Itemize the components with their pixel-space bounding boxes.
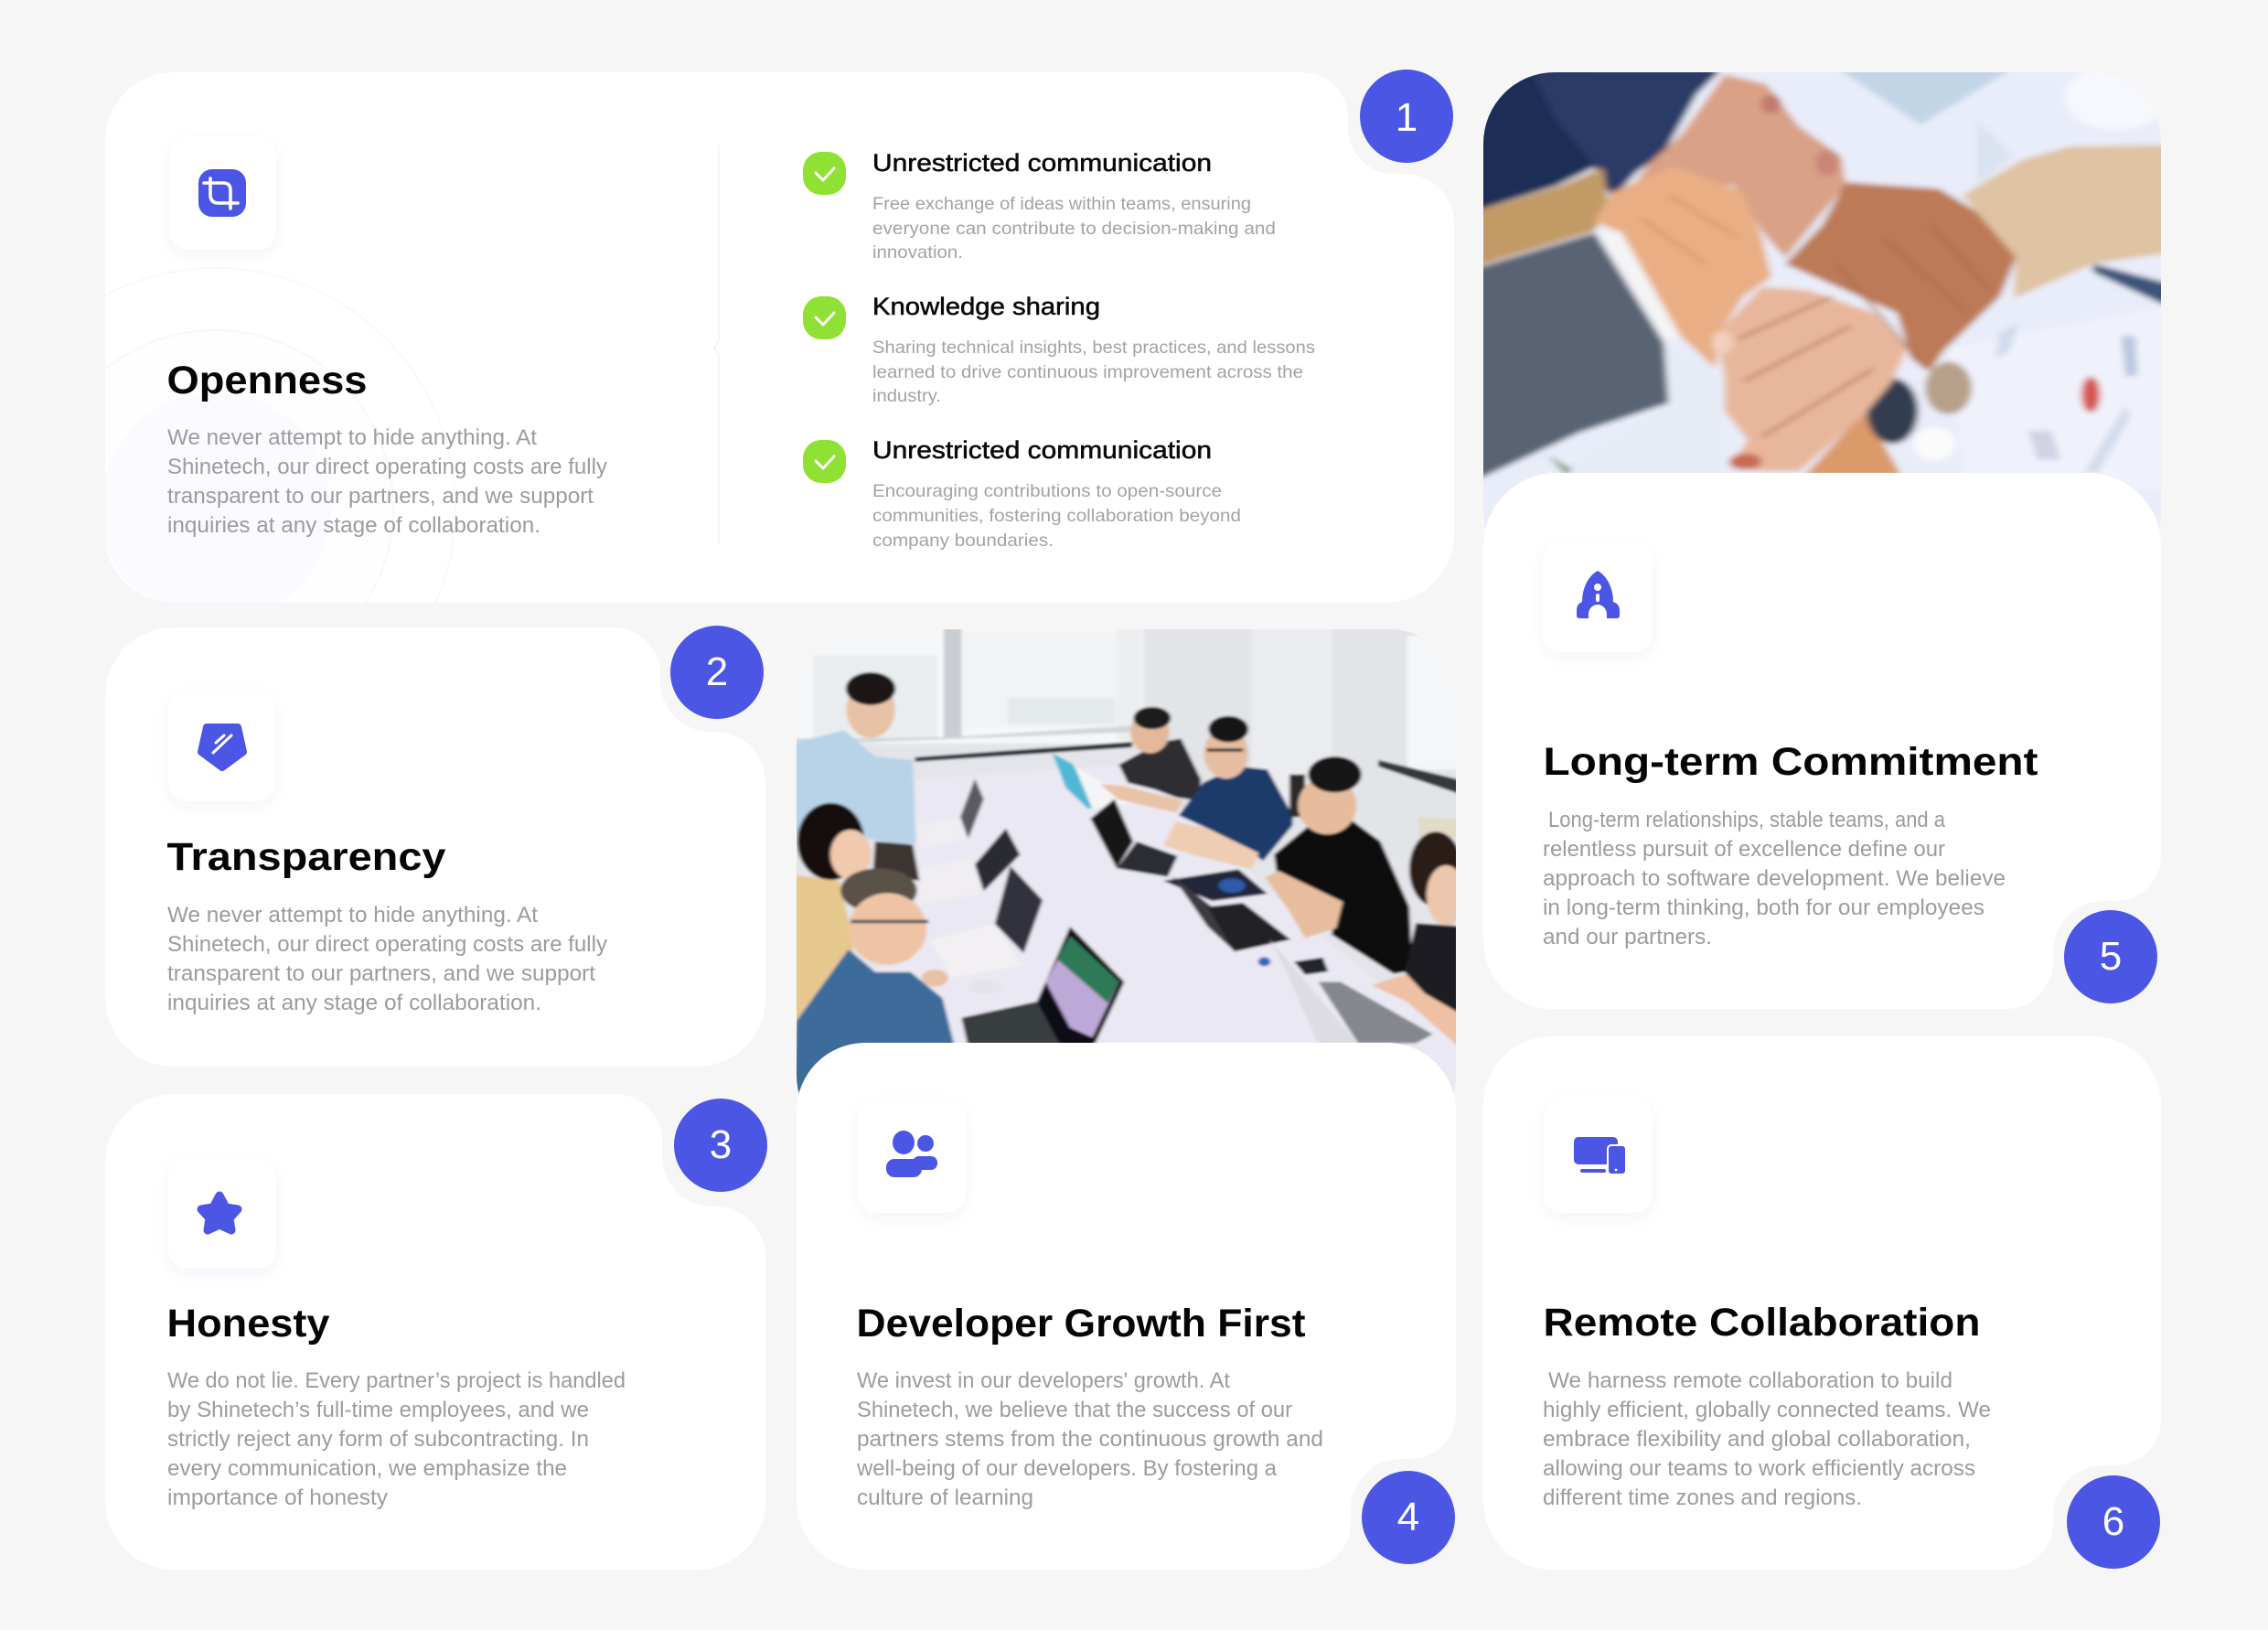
checklist item 3: communities, fostering collaboration beyond	[872, 506, 1241, 526]
card shape: developer growth first	[797, 1043, 1456, 1570]
text block: honesty body: by Shinetech’s full-time employees, and we	[167, 1398, 589, 1422]
badge 2	[670, 626, 764, 719]
text block: honesty body: importance of honesty	[167, 1485, 388, 1510]
checklist item 2: Knowledge sharing	[872, 293, 1100, 320]
icon: crop	[169, 136, 276, 250]
badge 4	[1362, 1471, 1455, 1564]
photo: stacked hands	[1483, 72, 2161, 529]
heading: Developer Growth First: Developer Growth First	[856, 1302, 1306, 1346]
card shape: openness	[105, 72, 1454, 603]
text block: developer growth body: partners stems from the continuous growth and	[857, 1427, 1323, 1452]
checklist item 1: innovation.	[872, 242, 963, 263]
checklist item 1: Unrestricted communication	[872, 149, 1212, 177]
text block: developer growth body: culture of learning	[857, 1485, 1033, 1510]
text block: long-term body: relentless pursuit of excellence define our	[1543, 837, 1945, 862]
text block: remote body	[1543, 1368, 1991, 1510]
heading: Transparency: Transparency	[166, 835, 446, 879]
text block: honesty body	[167, 1368, 626, 1510]
checklist item 3: company boundaries.	[872, 531, 1054, 551]
badge 6	[2067, 1475, 2160, 1569]
checklist item 2: learned to drive continuous improvement across the	[872, 362, 1303, 382]
badge 6: 6	[2102, 1499, 2124, 1544]
text block: transparency body	[167, 903, 607, 1015]
icon: rocket	[1543, 540, 1653, 652]
checklist item 3: Encouraging contributions to open-source	[872, 481, 1222, 501]
photo: team around a meeting table	[797, 629, 1456, 1094]
badge 3	[674, 1099, 767, 1192]
text block: long-term body: approach to software development. We believe	[1543, 866, 2006, 891]
text block: transparency body: inquiries at any stage of collaboration.	[167, 991, 541, 1015]
text block: transparency body: Shinetech, our direct operating costs are fully	[167, 932, 607, 957]
checklist item 1: everyone can contribute to decision-making and	[872, 219, 1276, 239]
heading: Long-term Commitment: Long-term Commitment	[1544, 740, 2038, 784]
text block: long-term body: Long-term relationships, stable teams, and a	[1548, 808, 1946, 832]
text block: openness body: transparent to our partners, and we support	[167, 484, 594, 509]
checklist item 2	[803, 293, 1315, 406]
panel: openness	[105, 72, 1454, 603]
text block: remote body: embrace flexibility and global collaboration,	[1543, 1427, 1971, 1452]
card shape: honesty	[105, 1094, 765, 1570]
text block: developer growth body: Shinetech, we believe that the success of our	[857, 1398, 1292, 1422]
icon: check	[803, 296, 846, 339]
text block: honesty body: every communication, we emphasize the	[167, 1456, 567, 1481]
text block: transparency body: We never attempt to hide anything. At	[167, 903, 538, 928]
text block: developer growth body: well-being of our developers. By fostering a	[856, 1456, 1278, 1481]
text block: transparency body: transparent to our partners, and we support	[167, 961, 595, 986]
text block: remote body: different time zones and regions.	[1543, 1485, 1862, 1510]
text block: remote body: highly efficient, globally connected teams. We	[1543, 1398, 1991, 1422]
badge 2: 2	[706, 649, 728, 694]
badge 5: 5	[2100, 934, 2122, 979]
panel: honesty	[105, 1094, 765, 1570]
heading: Remote Collaboration: Remote Collaboration	[1544, 1301, 1981, 1345]
icon: check	[803, 152, 846, 195]
icon: pentagon badge	[168, 690, 275, 801]
checklist item 2: Sharing technical insights, best practices, and lessons	[872, 338, 1315, 358]
checklist item 1	[803, 149, 1276, 263]
badge 5	[2064, 910, 2157, 1003]
text block: openness body: We never attempt to hide anything. At	[167, 425, 537, 450]
text block: honesty body: We do not lie. Every partner’s project is handled	[167, 1368, 626, 1393]
panel: transparency	[105, 627, 765, 1067]
card shape: transparency	[105, 627, 765, 1067]
text block: remote body: We harness remote collaboration to build	[1548, 1368, 1952, 1393]
card shape: remote collaboration	[1483, 1036, 2161, 1570]
icon: check	[803, 440, 846, 483]
text block: openness body	[167, 425, 607, 538]
badge 3: 3	[710, 1122, 732, 1167]
text block: openness body: inquiries at any stage of collaboration.	[167, 513, 540, 538]
panel: developer growth first	[797, 1043, 1456, 1570]
icon: devices	[1544, 1097, 1653, 1213]
panel: long-term commitment	[1483, 473, 2161, 1009]
text block: long-term body	[1543, 808, 2006, 949]
text block: openness body: Shinetech, our direct operating costs are fully	[167, 455, 607, 479]
badge 1	[1360, 70, 1453, 163]
text block: long-term body: and our partners.	[1543, 925, 1712, 949]
checklist item 1: Free exchange of ideas within teams, ensuring	[872, 194, 1251, 214]
icon: users	[858, 1099, 966, 1213]
text block: developer growth body: We invest in our developers' growth. At	[857, 1368, 1230, 1393]
text block: honesty body: strictly reject any form of subcontracting. In	[167, 1427, 589, 1452]
checklist item 3: Unrestricted communication	[872, 436, 1212, 464]
checklist item 2: industry.	[872, 386, 941, 406]
heading: Openness: Openness	[166, 359, 368, 402]
text block: remote body: allowing our teams to work efficiently across	[1543, 1456, 1975, 1481]
badge 4: 4	[1397, 1495, 1419, 1539]
card shape: long-term commitment	[1483, 473, 2161, 1009]
text block: developer growth body	[856, 1368, 1323, 1510]
badge 1: 1	[1396, 95, 1418, 140]
heading: Honesty: Honesty	[166, 1302, 330, 1346]
checklist item 3	[803, 436, 1241, 551]
panel: remote collaboration	[1483, 1036, 2161, 1570]
icon: star	[168, 1157, 276, 1269]
text block: long-term body: in long-term thinking, both for our employees	[1543, 895, 1984, 920]
